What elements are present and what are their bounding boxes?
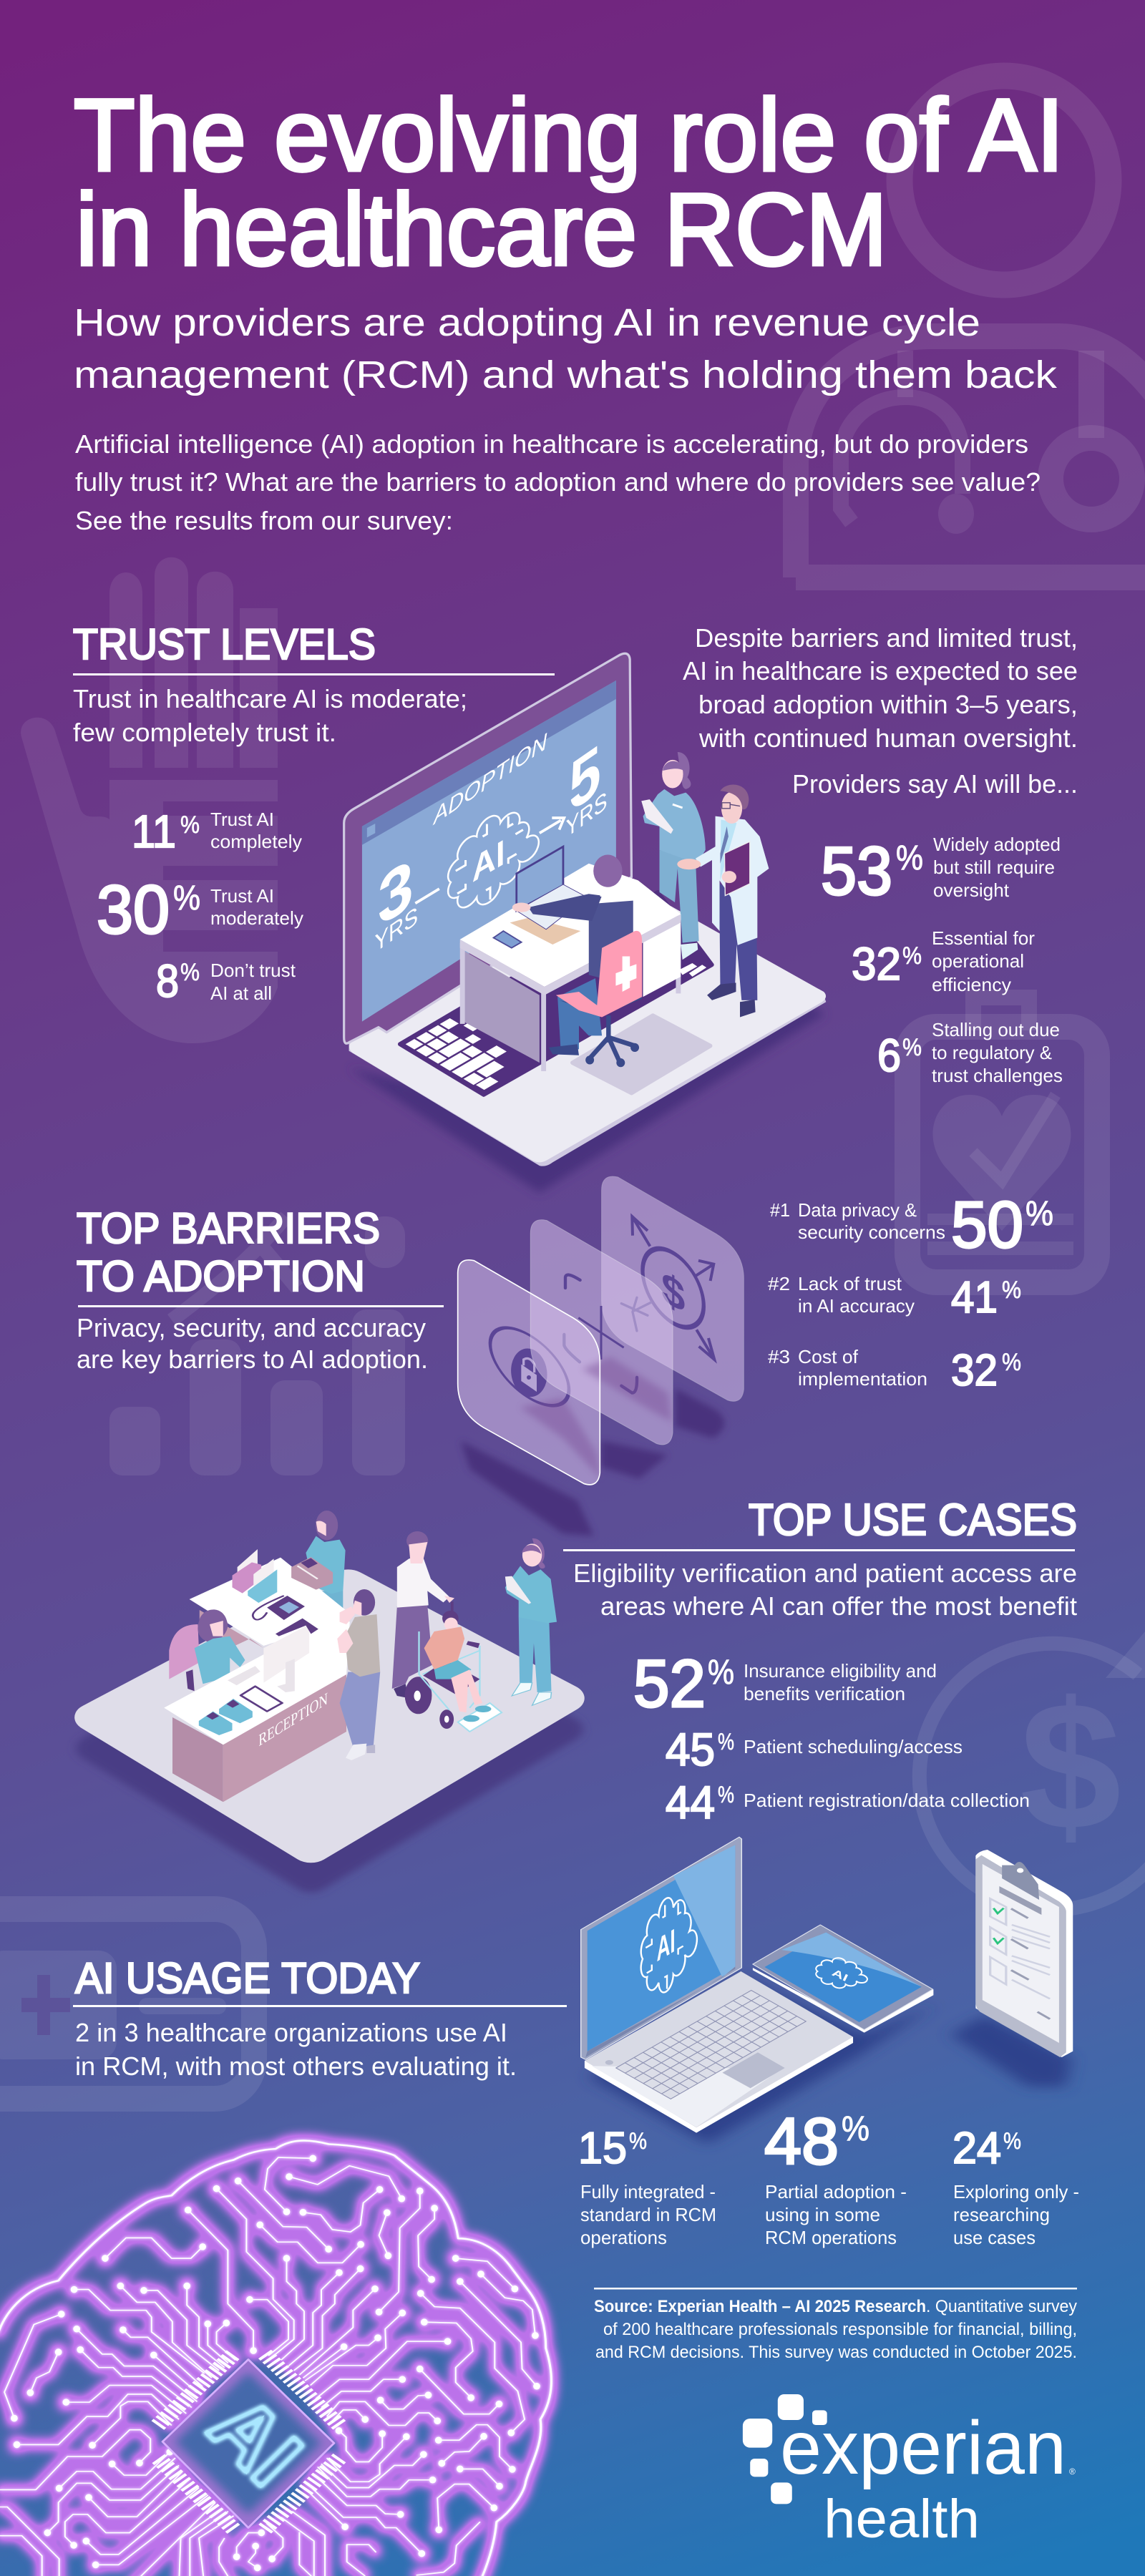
- standing patient: [337, 1589, 380, 1760]
- panel: trust levels: [73, 620, 555, 1007]
- stat: 52 percent: [633, 1646, 937, 1721]
- adoption label: ADOPTION: [432, 727, 547, 830]
- laptop base edge: [585, 2037, 853, 2133]
- source note: [594, 2288, 1077, 2362]
- barrier 3: cost: implementation: [798, 1368, 927, 1390]
- source note: Source: Experian Health – AI 2025 Research: [594, 2297, 926, 2316]
- stat: 15 percent: Fully integrated -: [580, 2181, 716, 2202]
- laptop AI cloud: AI: [657, 1923, 676, 1969]
- panel: adoption outlook: [683, 623, 1078, 1086]
- stat: 15 percent: standard in RCM: [580, 2204, 716, 2225]
- stat: 6 percent: [877, 1019, 1063, 1086]
- description: Eligibility verification and patient access are: [573, 1558, 1077, 1588]
- stat: 53 percent: [821, 833, 1061, 909]
- illustration: laptop, tablet and clipboard: [581, 1837, 1073, 2145]
- stat: 44 percent: %: [718, 1782, 734, 1807]
- 5 years label: YRS: [566, 785, 607, 844]
- stack of books: [291, 1557, 333, 1590]
- stat: 53 percent: %: [896, 839, 923, 877]
- barrier 3: cost: #3: [768, 1346, 790, 1367]
- description: [73, 684, 467, 747]
- stat: 48 percent: %: [842, 2110, 869, 2148]
- title: in healthcare RCM: [76, 173, 887, 287]
- stat: 15 percent: [578, 2124, 716, 2248]
- stat: 6 percent: 6: [877, 1030, 901, 1081]
- 5 years label: 5: [569, 728, 601, 828]
- registered mark: ®: [1069, 2467, 1076, 2477]
- intro text: See the results from our survey:: [75, 506, 453, 535]
- stat: 30 percent: 30: [97, 872, 170, 948]
- logo sub-brand: health: [824, 2489, 980, 2550]
- device shadows: [589, 1977, 1072, 2145]
- stat: 6 percent: trust challenges: [932, 1065, 1063, 1086]
- stat: 6 percent: Stalling out due: [932, 1019, 1060, 1040]
- heading: top use cases: TOP USE CASES: [749, 1496, 1077, 1545]
- barrier 2: trust in accuracy: in AI accuracy: [798, 1295, 915, 1317]
- chip pins: [157, 2354, 339, 2529]
- front card outline: [458, 1260, 600, 1485]
- focus icon: [564, 1275, 651, 1393]
- stat: 24 percent: researching: [953, 2204, 1050, 2225]
- desk: [460, 864, 681, 1071]
- keyboard: [228, 1666, 260, 1685]
- stat: 11 percent: [132, 806, 302, 857]
- lock icon: [490, 1312, 569, 1421]
- front card fill: [458, 1260, 600, 1485]
- stat: 15 percent: operations: [580, 2227, 667, 2248]
- intro text: Artificial intelligence (AI) adoption in healthcare is accelerating, but do providers: [75, 429, 1028, 459]
- logo wordmark: experian: [780, 2406, 1066, 2490]
- stat: 8 percent: 8: [156, 955, 179, 1007]
- clip board on desk: [276, 1619, 318, 1636]
- platform: [94, 1584, 564, 1848]
- laptop shadow: [349, 995, 825, 1193]
- stat: 52 percent: %: [708, 1654, 734, 1692]
- brain outline: [0, 2140, 551, 2576]
- rule: [78, 1305, 444, 1307]
- soft shadow on cards: [520, 1357, 671, 1479]
- laptop AI cloud: [641, 1880, 697, 2006]
- description: are key barriers to AI adoption.: [77, 1345, 428, 1374]
- watermark: stethoscope and magnifier: [796, 76, 1145, 577]
- dollar icon: [632, 1216, 714, 1360]
- right nurse: [505, 1538, 557, 1705]
- timeline connectors: [415, 818, 564, 903]
- stat: 24 percent: Exploring only -: [953, 2181, 1079, 2202]
- stat: 30 percent: moderately: [210, 907, 303, 929]
- main counter top: [164, 1615, 350, 1745]
- watermark: dollar circle: [920, 1631, 1145, 1910]
- barrier 3: cost: [768, 1346, 1021, 1395]
- stat: 48 percent: Partial adoption -: [765, 2181, 907, 2202]
- description: in RCM, with most others evaluating it.: [75, 2051, 517, 2081]
- teal books: [199, 1699, 253, 1735]
- laptop screen frame: [344, 653, 631, 1043]
- pink chair: [556, 931, 642, 1067]
- 5 years label: [566, 728, 607, 844]
- stat: 45 percent: %: [718, 1729, 734, 1755]
- stat: 24 percent: %: [1003, 2128, 1021, 2154]
- power button: [605, 2060, 613, 2065]
- dollar icon: $: [661, 1261, 685, 1323]
- description: Privacy, security, and accuracy: [77, 1313, 426, 1342]
- heading: AI usage today: AI USAGE TODAY: [75, 1954, 420, 2002]
- stat: 53 percent: 53: [821, 833, 892, 909]
- source note: . Quantitative survey: [926, 2297, 1077, 2316]
- panel: AI usage today: [73, 1954, 1079, 2248]
- stat: 6 percent: %: [902, 1034, 922, 1061]
- stat: 53 percent: but still require: [933, 857, 1055, 878]
- touchpad: [722, 2052, 785, 2088]
- watermark: medical card: [0, 1909, 254, 2099]
- stat: 8 percent: Don’t trust: [210, 960, 296, 981]
- laptop base: [349, 880, 826, 1162]
- logo: Experian Health: [743, 2394, 1076, 2550]
- tablet AI cloud: [816, 1956, 867, 1990]
- laptop screen: [581, 1837, 741, 2059]
- 3 years label: YRS: [374, 901, 418, 958]
- heading: top barriers: TOP BARRIERS: [77, 1204, 380, 1252]
- barrier 1: data privacy: security concerns: [798, 1221, 945, 1243]
- barrier 2: trust in accuracy: %: [1002, 1277, 1021, 1304]
- stat: 48 percent: [764, 2105, 907, 2248]
- main counter front: [172, 1674, 346, 1802]
- laptop base: [585, 1971, 853, 2127]
- outlook paragraph: broad adoption within 3–5 years,: [698, 690, 1078, 719]
- barrier 1: data privacy: 50: [951, 1189, 1023, 1262]
- stat: 53 percent: oversight: [933, 879, 1010, 901]
- stat: 32 percent: operational: [932, 950, 1024, 972]
- title: The evolving role of AI: [74, 79, 1064, 192]
- receptionist chair: [169, 1624, 200, 1679]
- watermark: clipboard with heart: [907, 997, 1097, 1282]
- 3 years label: 3: [378, 844, 414, 942]
- tablet on desk: [240, 1687, 282, 1712]
- barrier 2: trust in accuracy: #2: [768, 1273, 790, 1294]
- stat: 32 percent: efficiency: [932, 974, 1011, 995]
- stat: 24 percent: 24: [952, 2124, 1001, 2173]
- stat: 6 percent: to regulatory &: [932, 1042, 1052, 1063]
- receptionist: [186, 1609, 245, 1691]
- stat: 30 percent: Trust AI: [210, 885, 274, 907]
- heading: top barriers: [77, 1204, 380, 1300]
- subtitle: How providers are adopting AI in revenue cycle: [74, 301, 980, 344]
- rule: [73, 673, 555, 675]
- stat: 15 percent: 15: [578, 2124, 627, 2173]
- intro text: [75, 429, 1041, 535]
- barrier 3: cost: 32: [951, 1346, 998, 1395]
- doctor: [677, 785, 769, 1017]
- stat: 48 percent: RCM operations: [765, 2227, 897, 2248]
- tablet AI cloud: AI: [830, 1966, 850, 1984]
- barrier 3: cost: Cost of: [798, 1346, 859, 1367]
- outlook paragraph: AI in healthcare is expected to see: [683, 656, 1078, 686]
- stat: 24 percent: use cases: [953, 2227, 1036, 2248]
- stat: 44 percent: 44: [666, 1777, 715, 1828]
- source note: of 200 healthcare professionals responsible for financial, billing,: [603, 2320, 1077, 2339]
- neon AI mark: AI: [191, 2378, 319, 2504]
- stat: 11 percent: 11: [132, 806, 176, 857]
- middle card: [530, 1220, 673, 1445]
- stat: 44 percent: Patient registration/data collection: [744, 1790, 1030, 1811]
- card shadows: [460, 1388, 725, 1536]
- logo squares: [743, 2394, 827, 2504]
- screen display: [362, 680, 616, 1022]
- desk laptop: [517, 847, 587, 930]
- stat: 24 percent: [952, 2124, 1079, 2248]
- barrier 1: data privacy: %: [1025, 1195, 1053, 1233]
- illustration: reception desk scene: [94, 1511, 564, 1880]
- stat: 32 percent: Essential for: [932, 927, 1035, 949]
- keyboard: [616, 1990, 806, 2099]
- laptop base edge: [349, 995, 826, 1166]
- rule: [73, 2005, 567, 2007]
- barrier 2: trust in accuracy: Lack of trust: [798, 1273, 902, 1294]
- stat: 30 percent: %: [173, 879, 200, 917]
- touchpad: [572, 1015, 711, 1093]
- floor keyboard: [400, 892, 712, 1095]
- stat: 45 percent: 45: [666, 1724, 715, 1775]
- rule: [563, 1549, 1075, 1551]
- wheelchair attendant: [392, 1531, 454, 1698]
- outlook paragraph: Despite barriers and limited trust,: [695, 623, 1078, 653]
- stat: 32 percent: [852, 927, 1035, 995]
- panel: top barriers: [77, 1189, 1053, 1395]
- stat: 30 percent: [97, 872, 303, 948]
- stat: 53 percent: Widely adopted: [933, 834, 1061, 855]
- subtitle: [74, 301, 1058, 396]
- barrier 3: cost: %: [1002, 1349, 1021, 1376]
- platform shadow: [94, 1615, 564, 1880]
- stat: 11 percent: %: [180, 811, 200, 839]
- outlook paragraph: with continued human oversight.: [698, 723, 1078, 753]
- providers say: Providers say AI will be...: [792, 769, 1078, 799]
- AI brain cloud: [448, 788, 539, 927]
- seated man: [512, 854, 633, 1055]
- chip body: [162, 2359, 334, 2528]
- tablet: [753, 1925, 933, 2033]
- upper counter: [190, 1558, 351, 1648]
- stat: 8 percent: AI at all: [210, 982, 272, 1004]
- stat: 52 percent: benefits verification: [744, 1683, 905, 1704]
- stat: 32 percent: %: [902, 942, 922, 970]
- back nurse: [306, 1511, 346, 1617]
- stat: 11 percent: completely: [210, 831, 302, 852]
- illustration: three translucent barrier cards: [458, 1176, 744, 1536]
- AI brain cloud: AI: [472, 831, 505, 891]
- desk phone: [494, 931, 522, 948]
- barrier 2: trust in accuracy: [768, 1273, 1021, 1322]
- watermark: dollar circle: $: [1020, 1664, 1121, 1868]
- illustration: glowing circuit brain: [0, 2140, 551, 2576]
- description: areas where AI can offer the most benefit: [600, 1591, 1077, 1621]
- stat: 44 percent: [666, 1777, 1030, 1828]
- stat: 52 percent: 52: [633, 1646, 706, 1721]
- monitor: [263, 1624, 309, 1692]
- paper trays: [233, 1549, 277, 1603]
- stat: 48 percent: 48: [764, 2105, 839, 2178]
- paper and phone: [510, 917, 580, 945]
- watermark: hand: [21, 557, 278, 1043]
- description: [77, 1313, 428, 1374]
- stat: 32 percent: 32: [852, 938, 901, 990]
- panel: top use cases: [563, 1496, 1077, 1828]
- wheelchair with patient: [405, 1611, 502, 1732]
- subtitle: management (RCM) and what's holding them back: [74, 353, 1058, 396]
- title: [74, 79, 1064, 287]
- heading: trust levels: TRUST LEVELS: [73, 620, 376, 668]
- stat: 15 percent: %: [629, 2128, 647, 2154]
- stat: 45 percent: [666, 1724, 963, 1775]
- description: Trust in healthcare AI is moderate;: [73, 684, 467, 713]
- stat: 8 percent: %: [180, 959, 200, 986]
- description: few completely trust it.: [73, 718, 336, 747]
- heading: top barriers: TO ADOPTION: [77, 1252, 365, 1300]
- barrier 1: data privacy: #1: [770, 1199, 790, 1221]
- clipboard: [975, 1850, 1073, 2057]
- intro text: fully trust it? What are the barriers to adoption and where do providers see value?: [75, 467, 1041, 497]
- barrier 1: data privacy: [770, 1189, 1053, 1262]
- stat: 11 percent: Trust AI: [210, 809, 274, 830]
- description: [573, 1558, 1077, 1621]
- back card: [602, 1176, 744, 1401]
- source note: and RCM decisions. This survey was conducted in October 2025.: [595, 2343, 1077, 2362]
- telephone: [253, 1596, 305, 1620]
- watermark: bar chart with arrow: [109, 1216, 405, 1475]
- stat: 8 percent: [156, 955, 296, 1007]
- stat: 48 percent: using in some: [765, 2204, 880, 2225]
- outlook paragraph: [683, 623, 1078, 753]
- illustration: giant laptop with staff: [344, 653, 826, 1193]
- stat: 52 percent: Insurance eligibility and: [744, 1660, 937, 1682]
- description: [75, 2018, 517, 2081]
- stat: 45 percent: Patient scheduling/access: [744, 1736, 963, 1757]
- screen title bar: [362, 680, 616, 845]
- nurse: [641, 752, 706, 960]
- barrier 2: trust in accuracy: 41: [951, 1273, 998, 1322]
- reception sign: RECEPTION: [258, 1688, 328, 1750]
- description: 2 in 3 healthcare organizations use AI: [75, 2018, 507, 2047]
- brain circuit traces: [0, 2140, 551, 2576]
- barrier 1: data privacy: Data privacy &: [798, 1199, 917, 1221]
